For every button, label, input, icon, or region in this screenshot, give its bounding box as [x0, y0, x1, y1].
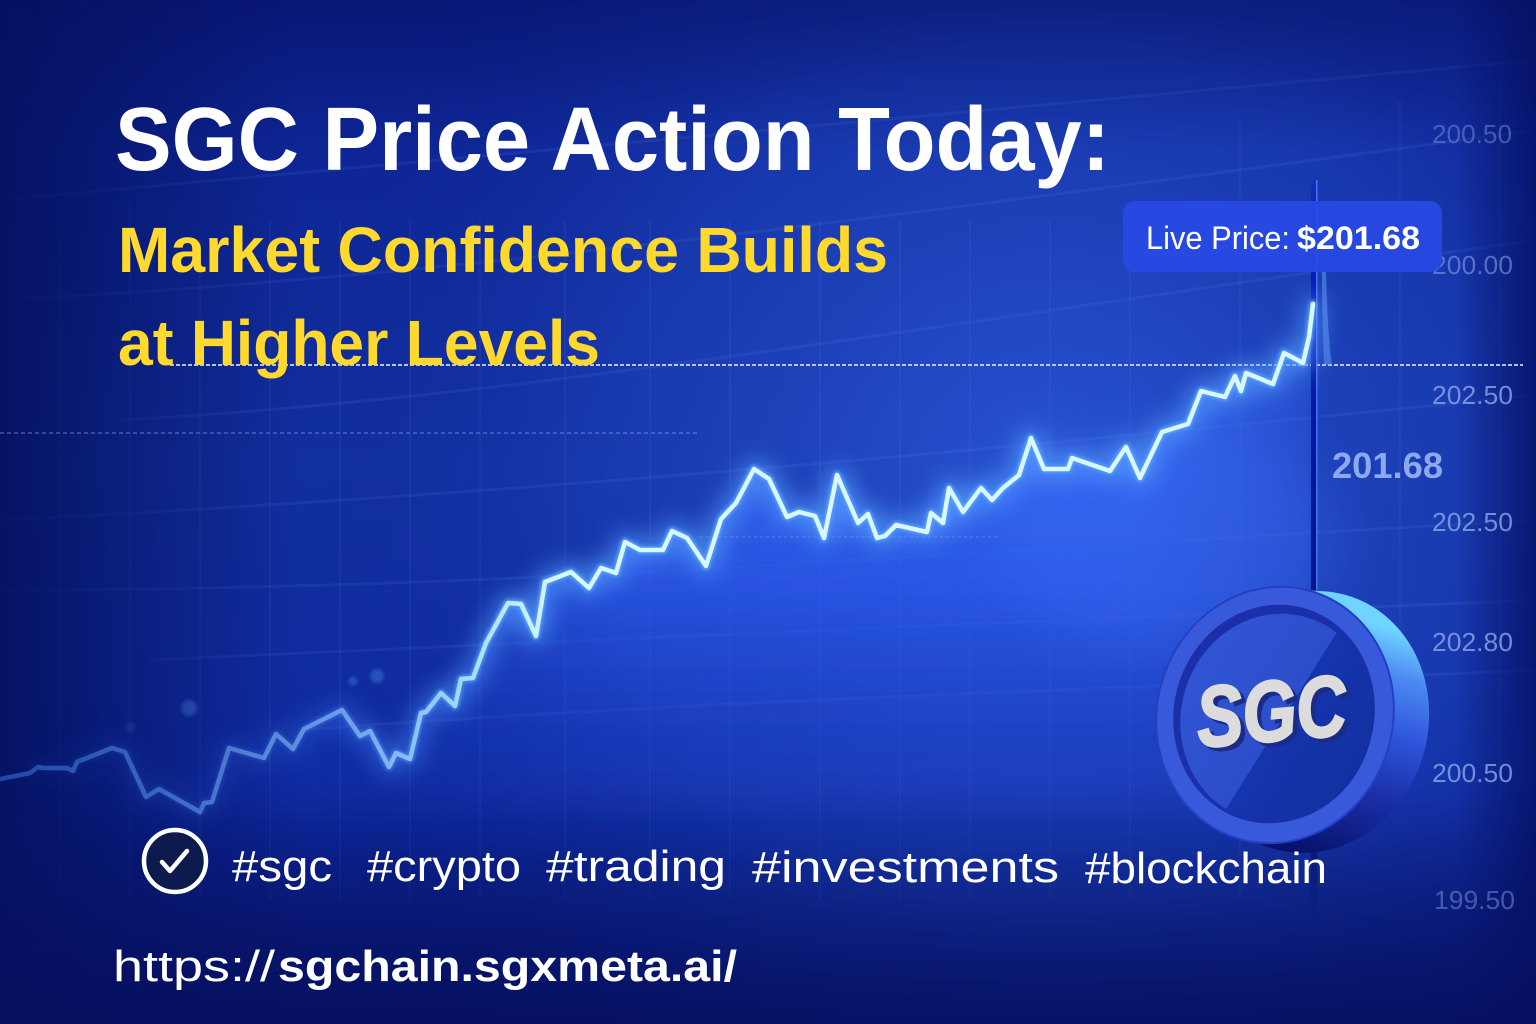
coin inner face	[1156, 591, 1398, 845]
price axis labels: 202.50	[1432, 507, 1513, 537]
price axis labels: 200.50	[1432, 119, 1512, 149]
right side bloom	[1000, 430, 1340, 650]
price line	[0, 304, 1313, 812]
title: SGC Price Action Today:	[115, 90, 1110, 190]
website url	[113, 942, 737, 991]
coin	[1126, 558, 1460, 881]
hashtags: #crypto	[367, 842, 521, 891]
hashtags	[232, 842, 1327, 893]
price axis labels: 199.50	[1434, 885, 1515, 915]
price axis labels: 202.50	[1432, 380, 1513, 410]
hashtags: #sgc	[232, 842, 332, 891]
current price label: 201.68	[1332, 445, 1443, 486]
price axis labels: 202.80	[1432, 627, 1513, 657]
live price callout	[1123, 201, 1442, 272]
live price callout: $201.68	[1297, 220, 1420, 256]
glowing bokeh dots	[125, 669, 384, 732]
coin inner recess	[1148, 581, 1400, 847]
coin label: SGC	[1197, 661, 1356, 770]
hashtags: #blockchain	[1085, 844, 1327, 893]
hashtags: #trading	[546, 842, 726, 891]
coin edge	[1160, 563, 1460, 881]
dotted reference lines	[0, 365, 1523, 537]
coin label: SGC	[1192, 657, 1352, 766]
price axis labels: 200.00	[1432, 250, 1513, 280]
website url: sgchain.sgxmeta.ai/	[278, 942, 737, 991]
hashtags: #investments	[752, 843, 1059, 892]
vertical price marker	[1311, 180, 1332, 930]
subtitle	[118, 214, 888, 379]
price axis labels: 200.50	[1432, 758, 1513, 788]
live price callout: Live Price:	[1146, 220, 1290, 256]
area under the price line	[422, 362, 1311, 784]
website url: https://	[113, 942, 276, 991]
price axis labels	[1432, 119, 1515, 915]
subtitle: at Higher Levels	[118, 307, 600, 379]
icon: check badge	[144, 830, 206, 892]
subtitle: Market Confidence Builds	[118, 214, 888, 286]
coin outer face	[1126, 558, 1424, 872]
